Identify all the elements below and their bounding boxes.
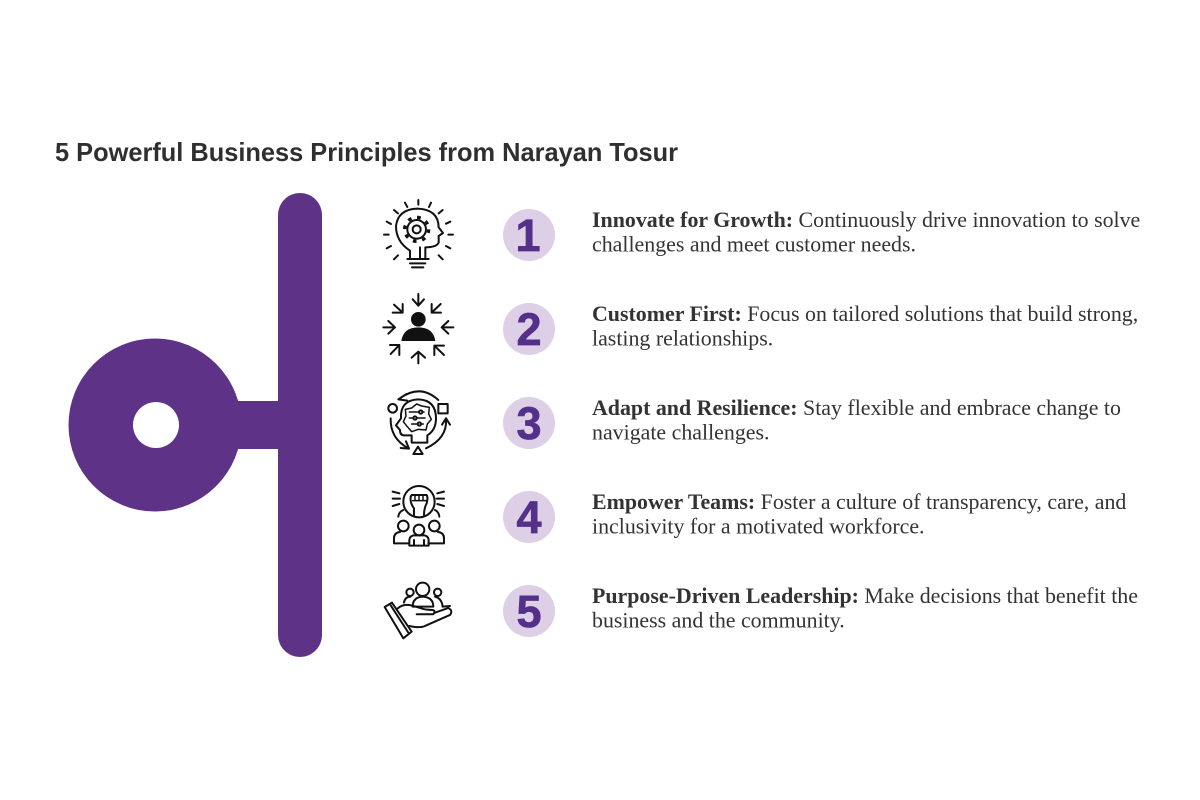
text: Adapt and Resilience: Stay flexible and embrace change to xyxy=(798,395,1121,420)
icon: lightbulb head with gear xyxy=(384,200,453,267)
number badge 2: 2 xyxy=(516,304,542,355)
number badge 1: 1 xyxy=(515,210,541,261)
text: Customer First: lasting relationships. xyxy=(592,326,773,350)
icon: hand holding people xyxy=(385,583,451,638)
text: Customer First: Customer First: xyxy=(592,301,742,326)
purple key-shaped timeline graphic xyxy=(68,193,322,657)
text: Purpose-Driven Leadership: Purpose-Driven Leadership: xyxy=(592,583,859,608)
icon: person with arrows pointing inward xyxy=(383,294,453,363)
text: Customer First: Focus on tailored solutions that build strong, xyxy=(742,301,1138,326)
text: Innovate for Growth: Continuously drive innovation to solve xyxy=(793,207,1140,232)
icon: raised fist above team xyxy=(393,486,444,546)
text: Empower Teams: Foster a culture of transparency, care, and xyxy=(755,489,1126,514)
panel: principle 4 xyxy=(393,486,1126,546)
text: Innovate for Growth: Innovate for Growth: xyxy=(592,207,793,232)
number badge 4: 4 xyxy=(516,492,542,543)
number badge 2 xyxy=(503,303,555,355)
number badge 5 xyxy=(503,585,555,637)
title: 5 Powerful Business Principles from Narayan Tosur xyxy=(55,139,678,167)
text: Purpose-Driven Leadership: Make decisions that benefit the xyxy=(859,583,1138,608)
panel: principle 1 xyxy=(384,200,1140,267)
panel: principle 3 xyxy=(388,391,1121,454)
text: Adapt and Resilience: Adapt and Resilience: xyxy=(592,395,798,420)
number badge 3: 3 xyxy=(516,398,542,449)
number badge 1 xyxy=(503,209,555,261)
panel: principle 5 xyxy=(385,583,1138,638)
text: Empower Teams: inclusivity for a motivated workforce. xyxy=(592,514,925,538)
number badge 3 xyxy=(503,397,555,449)
text: Empower Teams: Empower Teams: xyxy=(592,489,755,514)
panel: principle 2 xyxy=(383,294,1138,363)
number badge 4 xyxy=(503,491,555,543)
text: Innovate for Growth: challenges and meet customer needs. xyxy=(592,232,916,256)
icon: head with cycle of shapes xyxy=(388,391,450,454)
text: Purpose-Driven Leadership: business and the community. xyxy=(592,608,845,632)
number badge 5: 5 xyxy=(516,586,542,637)
text: Adapt and Resilience: navigate challenges. xyxy=(592,420,769,444)
